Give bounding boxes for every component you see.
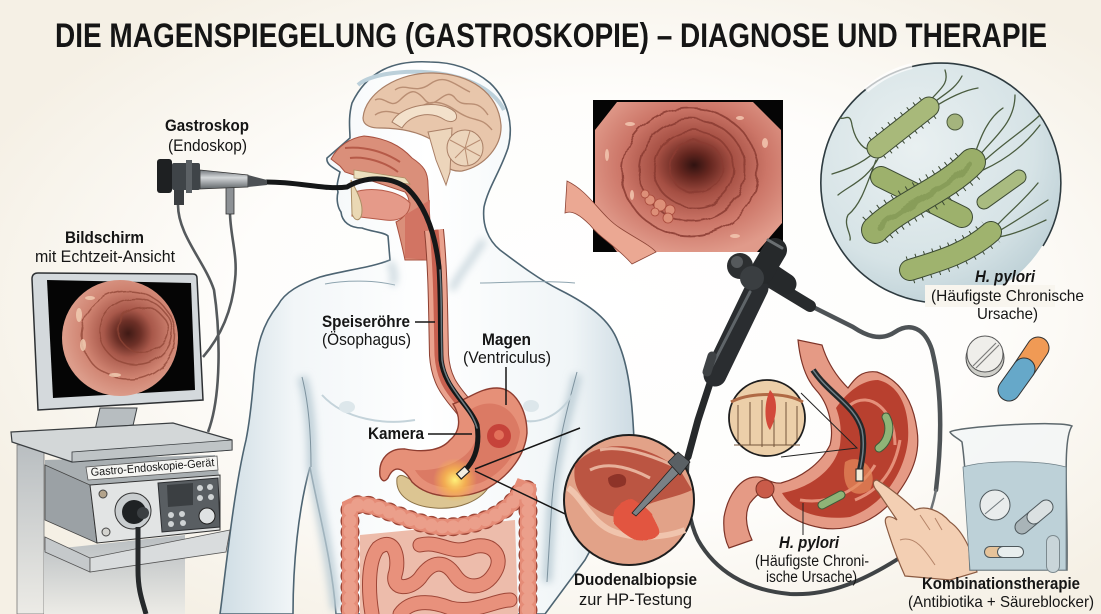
label: upper H. pylori: Ursache) bbox=[977, 306, 1038, 323]
hand pointing bbox=[873, 480, 977, 580]
label: speiseröhre bbox=[322, 313, 411, 349]
callout lines bbox=[415, 322, 582, 522]
label: lower H. pylori: (Häufigste Chroni- bbox=[755, 553, 869, 570]
label: upper H. pylori: H. pylori bbox=[975, 267, 1036, 286]
H. pylori sphere bbox=[820, 63, 1061, 307]
oesophagus bbox=[434, 230, 466, 410]
biopsy magnifier bbox=[564, 435, 694, 565]
monitor bbox=[32, 273, 203, 440]
label: magen: (Ventriculus) bbox=[463, 349, 551, 367]
label: duodenalbiopsie: Duodenalbiopsie bbox=[574, 570, 697, 589]
label: speiseröhre: Speiseröhre bbox=[322, 313, 410, 331]
endoscopic image bbox=[565, 100, 783, 264]
beaker with medication bbox=[950, 424, 1072, 570]
medical cart with endoscopy unit bbox=[11, 423, 232, 614]
label: bildschirm: mit Echtzeit-Ansicht bbox=[35, 248, 175, 266]
tablet and capsule bbox=[966, 336, 1038, 390]
label: gastroskop: Gastroskop bbox=[165, 116, 249, 135]
device label: Gastro-Endoskopie-Gerät bbox=[90, 457, 216, 479]
label: duodenalbiopsie: zur HP-Testung bbox=[579, 591, 692, 609]
label: bildschirm: Bildschirm bbox=[65, 228, 144, 247]
nasal cavity and throat bbox=[331, 136, 432, 260]
label: kombinationstherapie bbox=[908, 574, 1094, 611]
label: magen bbox=[463, 330, 551, 367]
label: kombinationstherapie: (Antibiotika + Säureblocker) bbox=[908, 594, 1094, 611]
label: upper H. pylori bbox=[931, 267, 1084, 323]
human body silhouette bbox=[220, 62, 634, 614]
brain bbox=[363, 73, 501, 185]
flexible endoscope bbox=[687, 240, 940, 594]
label: lower H. pylori: ische Ursache) bbox=[766, 569, 857, 586]
handheld gastroscope with connector cables bbox=[157, 159, 267, 432]
label: kamera: Kamera bbox=[368, 424, 424, 443]
label: gastroskop: (Endoskop) bbox=[168, 136, 247, 155]
label: lower H. pylori bbox=[755, 533, 869, 586]
large intestine bbox=[350, 488, 528, 614]
label: lower H. pylori: H. pylori bbox=[779, 533, 840, 552]
label: gastroskop bbox=[165, 116, 249, 155]
label: magen: Magen bbox=[482, 330, 531, 349]
bacteria bbox=[832, 70, 1048, 270]
small intestine bbox=[360, 520, 518, 614]
gastroscope tube through the body bbox=[267, 179, 478, 479]
label: duodenalbiopsie bbox=[574, 570, 697, 609]
tissue flap bbox=[565, 181, 656, 264]
pancreas bbox=[397, 475, 488, 508]
stomach bbox=[380, 388, 527, 502]
label: speiseröhre: (Ösophagus) bbox=[322, 331, 411, 349]
label: bildschirm bbox=[35, 228, 175, 266]
label: upper H. pylori: (Häufigste Chronische bbox=[931, 288, 1084, 305]
histology inset bbox=[729, 380, 805, 456]
anatomical stomach diagram bbox=[724, 340, 918, 548]
label: kombinationstherapie: Kombinationstherapie bbox=[922, 574, 1080, 593]
